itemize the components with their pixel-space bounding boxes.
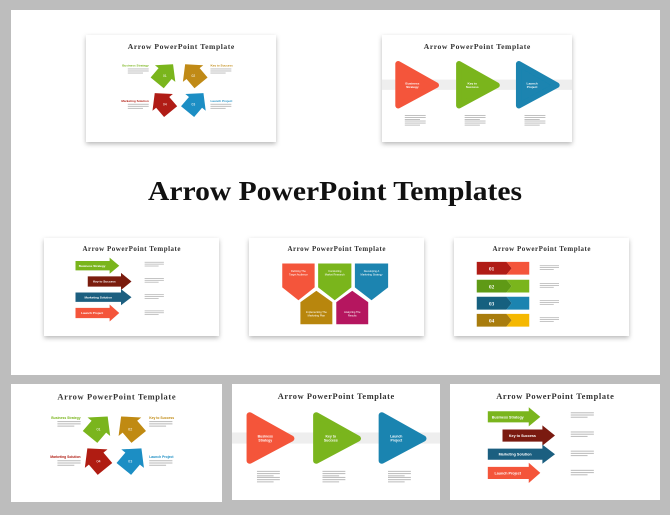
slide: pentagon arrows middle: Results xyxy=(348,313,357,317)
slide: numbered chevrons middle-right: 01 xyxy=(489,266,495,272)
slide: pentagon arrows middle: Target Audience xyxy=(289,273,308,276)
slide: pentagon arrows middle: Arrow PowerPoint Template xyxy=(287,246,386,253)
slide: pentagon arrows middle: Market Research xyxy=(325,273,345,276)
slide: pentagon arrows middle: Defining The xyxy=(291,269,306,273)
slide: pentagon arrows middle: Implementing The xyxy=(306,310,327,314)
slide: numbered chevrons middle-right: 04 xyxy=(489,318,495,324)
slide: triangles top-right xyxy=(382,35,572,142)
slide: triangles bottom-middle xyxy=(232,384,440,500)
slide: pentagon arrows middle: Developing A xyxy=(364,269,379,273)
slide: arrow list middle-left xyxy=(44,238,219,336)
slide: numbered chevrons middle-right: 02 xyxy=(489,284,495,290)
slide: arrow list bottom-right xyxy=(450,384,660,500)
white top panel xyxy=(11,10,660,375)
slide: pentagon arrows middle: Analyzing The xyxy=(344,310,361,314)
slide: pentagon arrows middle: Marketing Strategy xyxy=(361,273,383,276)
slide: pentagon arrows middle: Marketing Plan xyxy=(308,313,326,317)
main title: Arrow PowerPoint Templates xyxy=(148,176,522,206)
slide: pentagon arrows middle xyxy=(249,238,424,336)
slide: numbered chevrons middle-right: Arrow PowerPoint Template xyxy=(492,246,591,253)
slide: numbered chevrons middle-right: 03 xyxy=(489,301,495,307)
slide: pentagon arrows middle: Conducting xyxy=(328,269,342,273)
slide: quad arrows top-left xyxy=(86,35,276,142)
slide: quad arrows bottom-left xyxy=(11,384,222,502)
slide: numbered chevrons middle-right xyxy=(454,238,629,336)
